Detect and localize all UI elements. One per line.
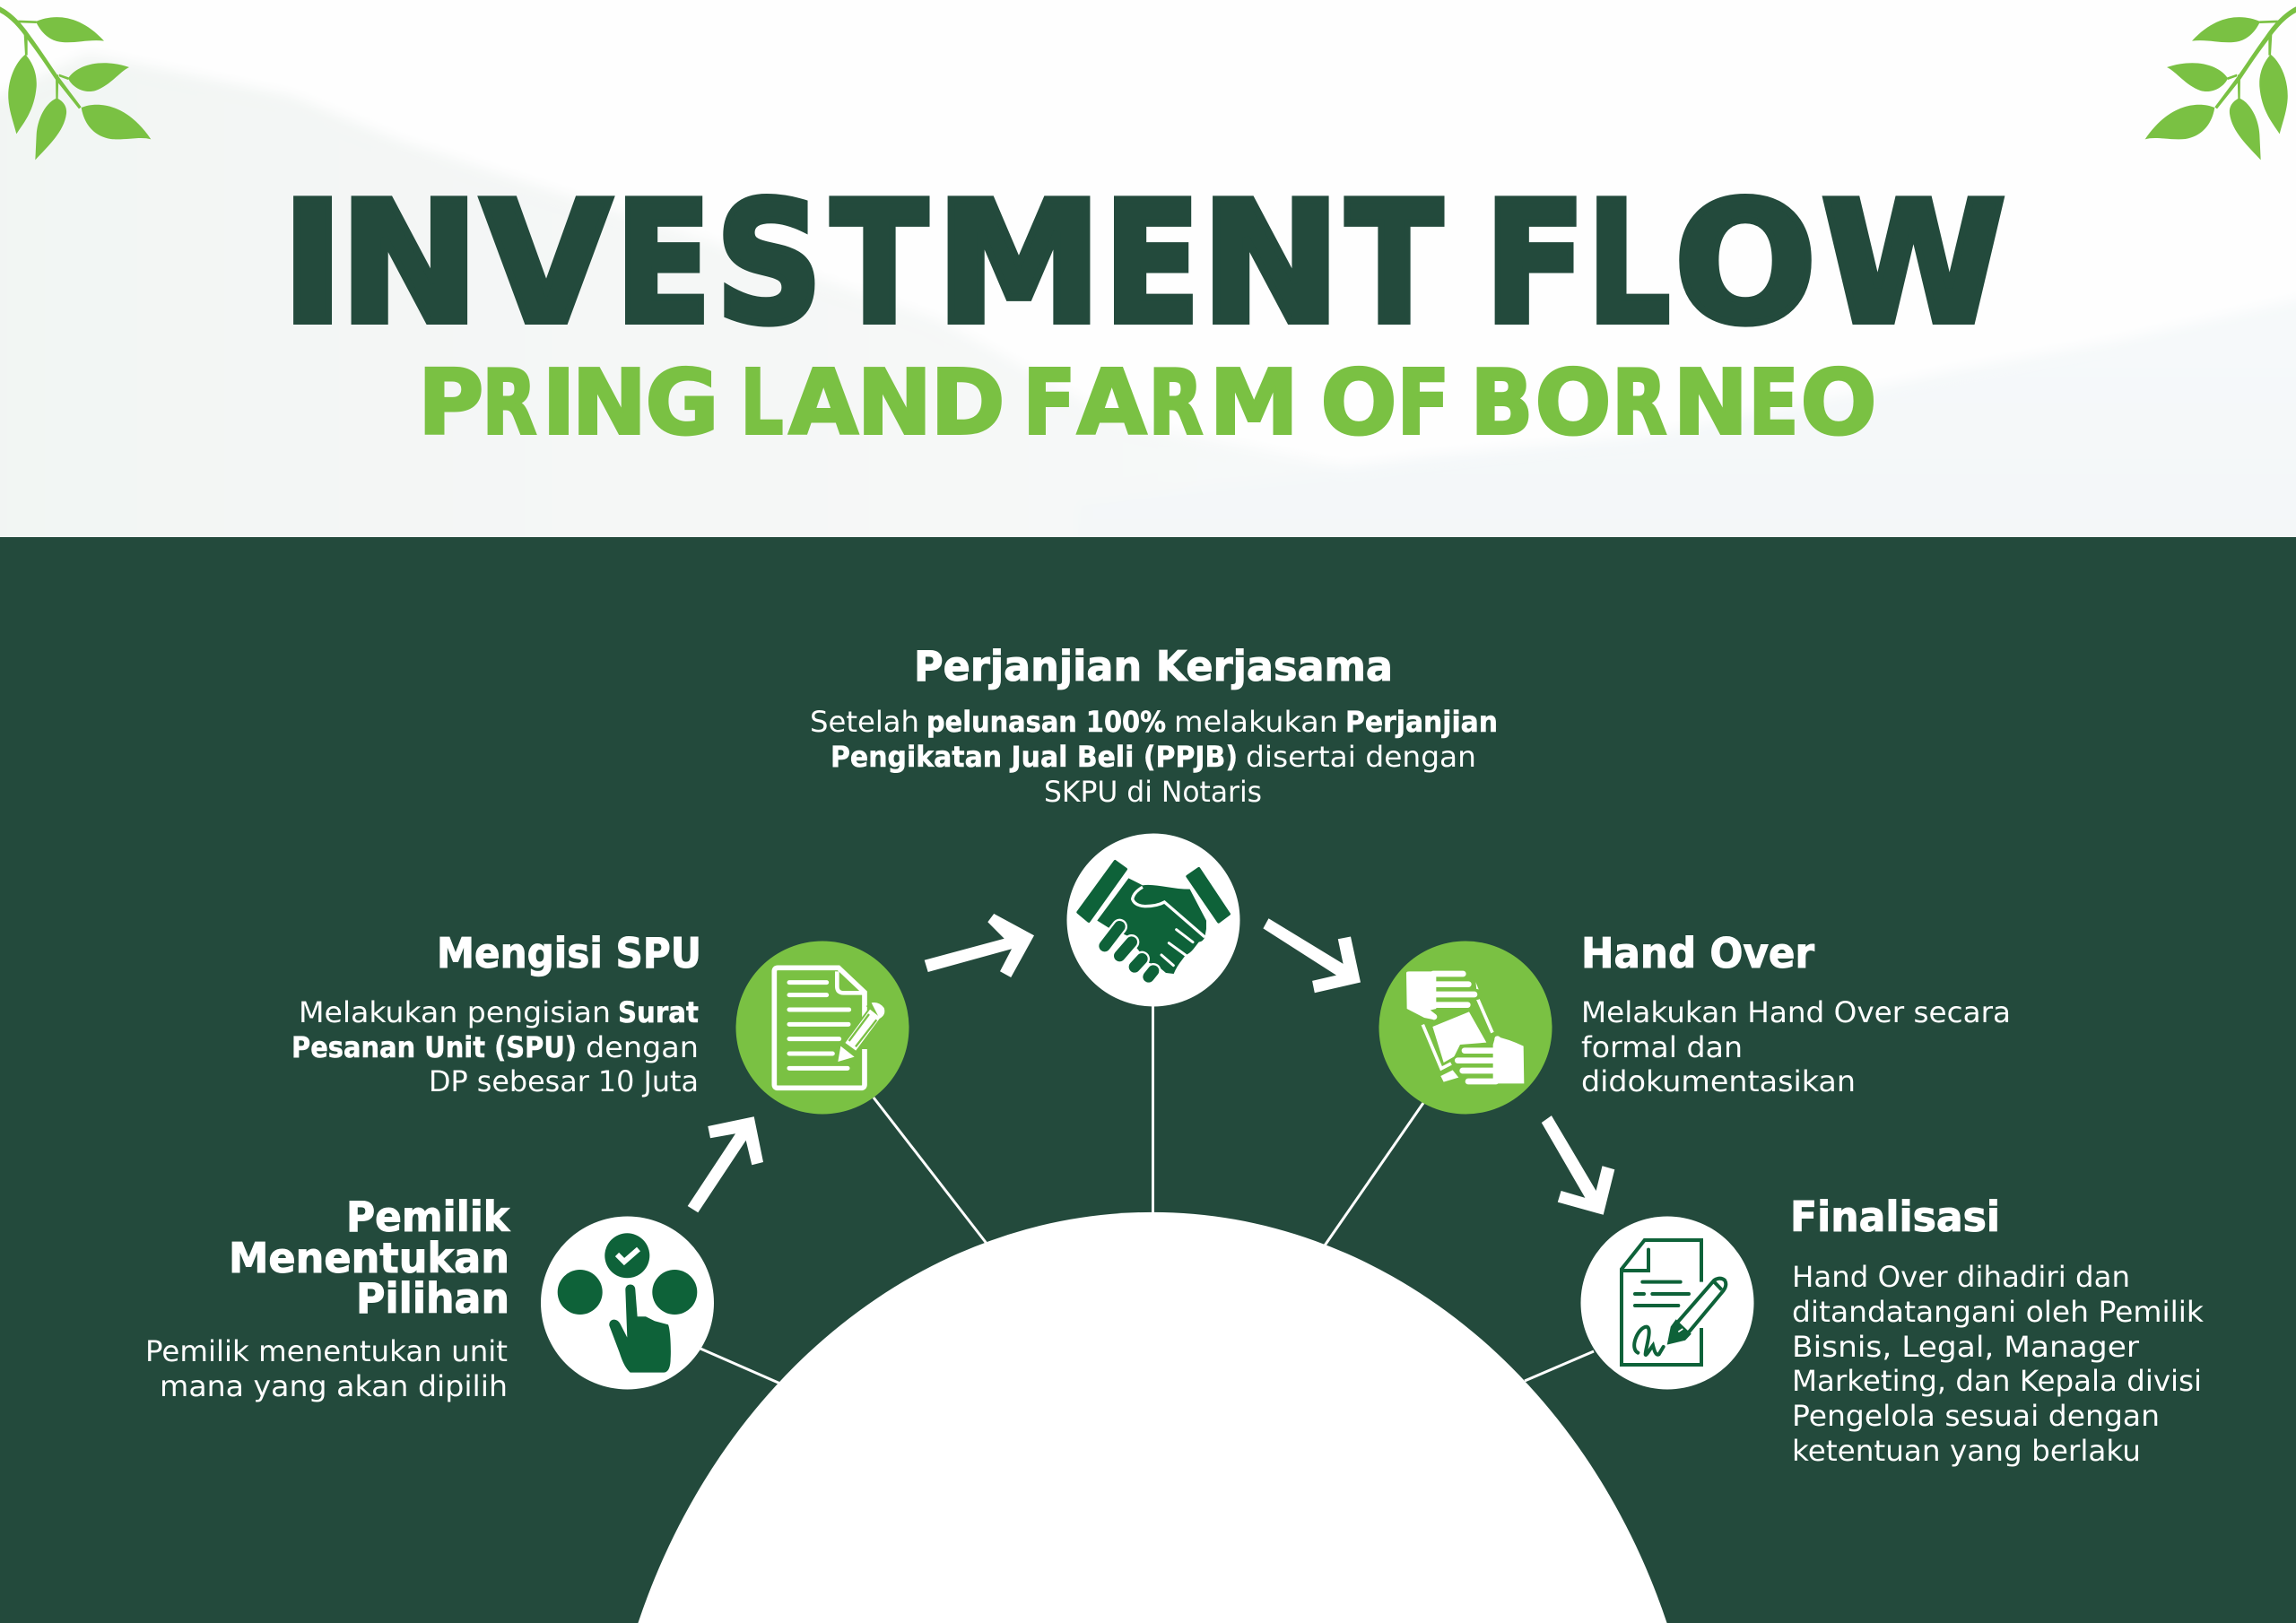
- title: N: [1201, 166, 1341, 360]
- text: step 3 description: Perjanjian: [1345, 705, 1498, 739]
- text: step 2 description: dengan: [586, 1030, 699, 1064]
- subtitle: A: [789, 350, 858, 456]
- text: step 2 description: DP sebesar 10 Juta: [429, 1064, 699, 1098]
- title: O: [1674, 166, 1816, 360]
- subtitle: N: [1674, 350, 1748, 456]
- subtitle: R: [1148, 350, 1204, 456]
- text: step 1 description: [145, 1334, 508, 1403]
- step 2: SPU: [291, 929, 909, 1114]
- heading: Finalisasi: Finalisasi: [1790, 1193, 2000, 1241]
- text: step 4 description: formal dan: [1581, 1030, 1743, 1064]
- arrow 4 to 5: [1542, 1115, 1614, 1215]
- text: step 5 description: Pengelola sesuai dengan: [1792, 1399, 2160, 1433]
- step 1: choice: [145, 1193, 714, 1403]
- subtitle: L: [741, 350, 784, 456]
- text: step 2 description: Surat: [618, 995, 699, 1029]
- text: step 3 description: SKPU di Notaris: [1044, 775, 1262, 809]
- icon: document with pencil: [735, 942, 909, 1114]
- title: F: [1484, 166, 1586, 360]
- text: step 5 description: [1792, 1260, 2204, 1468]
- heading: Pemilik Menentukan Pilihan: Pilihan: [356, 1274, 509, 1323]
- arrow 3 to 4: [1263, 918, 1361, 993]
- step 4: hand over: [1379, 929, 2011, 1114]
- icon: hand choosing option: [541, 1216, 714, 1390]
- text: step 2 description: Melakukan pengisian: [299, 995, 611, 1029]
- text: step 2 description: [291, 995, 699, 1098]
- text: step 3 description: [810, 705, 1498, 809]
- title: S: [716, 166, 822, 360]
- arrow 2 to 3: [925, 914, 1034, 977]
- heading: Pemilik Menentukan Pilihan: Menentukan: [229, 1234, 509, 1282]
- title: V: [482, 166, 611, 360]
- white central dome: [638, 1212, 1667, 1623]
- subtitle: D: [931, 350, 1005, 456]
- icon: hands passing document: [1379, 942, 1552, 1114]
- text: step 5 description: ditandatangani oleh Pemilik: [1792, 1295, 2204, 1329]
- icon: leaves top left: [0, 6, 151, 160]
- subtitle: O: [1801, 350, 1877, 456]
- subtitle: N: [857, 350, 932, 456]
- text: step 3 description: melakukan: [1174, 705, 1338, 739]
- connector lines: [700, 1006, 1594, 1384]
- heading: Pemilik Menentukan Pilihan: Pemilik: [346, 1193, 510, 1241]
- title: E: [615, 166, 711, 360]
- text: step 4 description: Melakukan Hand Over secara: [1581, 995, 2011, 1029]
- subtitle: F: [1022, 350, 1076, 456]
- heading: Perjanjian Kerjasama: Perjanjian Kerjasama: [914, 642, 1393, 690]
- text: step 4 description: [1581, 995, 2011, 1098]
- text: step 5 description: Hand Over dihadiri dan: [1792, 1260, 2130, 1294]
- text: step 2 description: Pesanan Unit (SPU): [291, 1030, 577, 1064]
- subtitle: R: [1613, 350, 1666, 456]
- subtitle: B: [1471, 350, 1534, 456]
- text: step 5 description: Bisnis, Legal, Manager: [1792, 1330, 2140, 1364]
- text: step 5 description: Marketing, dan Kepala divisi: [1792, 1364, 2202, 1398]
- subtitle: N: [572, 350, 647, 456]
- title: L: [1587, 166, 1670, 360]
- arrow 1 to 2: [688, 1116, 763, 1212]
- subtitle: M: [1209, 350, 1299, 456]
- subtitle: A: [1077, 350, 1146, 456]
- text: step 1 description: mana yang akan dipilih: [160, 1369, 508, 1403]
- heading: Pemilik Menentukan Pilihan: [229, 1193, 510, 1323]
- text: step 5 description: ketentuan yang berlaku: [1792, 1434, 2141, 1468]
- title: T: [831, 166, 927, 360]
- subtitle: E: [1749, 350, 1799, 456]
- text: step 3 description: pelunasan 100%: [926, 705, 1166, 739]
- step 5: finalisation: [1580, 1193, 2204, 1468]
- title: N: [339, 166, 479, 360]
- title: M: [936, 166, 1102, 360]
- subtitle: F: [1397, 350, 1449, 456]
- heading: Hand Over: Hand Over: [1581, 929, 1814, 977]
- misty hills background: [0, 0, 2296, 574]
- text: step 3 description: Setelah: [810, 705, 919, 739]
- title: I: [282, 166, 344, 360]
- text: step 1 description: Pemilik menentukan unit: [145, 1334, 508, 1368]
- text: step 3 description: disertai dengan: [1246, 740, 1476, 774]
- icon: handshake: [1067, 834, 1239, 1006]
- subtitle: P: [418, 350, 483, 456]
- icon: signed document with pen: [1580, 1216, 1754, 1390]
- dark green panel: [0, 537, 2296, 1623]
- title: W: [1822, 166, 2005, 360]
- title: E: [1104, 166, 1200, 360]
- title: T: [1346, 166, 1442, 360]
- subtitle: O: [1535, 350, 1612, 456]
- subtitle: I: [542, 350, 576, 456]
- heading: Mengisi SPU: Mengisi SPU: [437, 929, 701, 977]
- subtitle: R: [483, 350, 536, 456]
- subtitle: G: [646, 350, 719, 456]
- text: step 4 description: didokumentasikan: [1581, 1064, 1856, 1098]
- icon: leaves top right: [2145, 6, 2296, 160]
- subtitle: O: [1320, 350, 1397, 456]
- step 3: agreement: [810, 642, 1498, 1006]
- text: step 3 description: Pengikatan Jual Beli (PPJB): [831, 740, 1238, 774]
